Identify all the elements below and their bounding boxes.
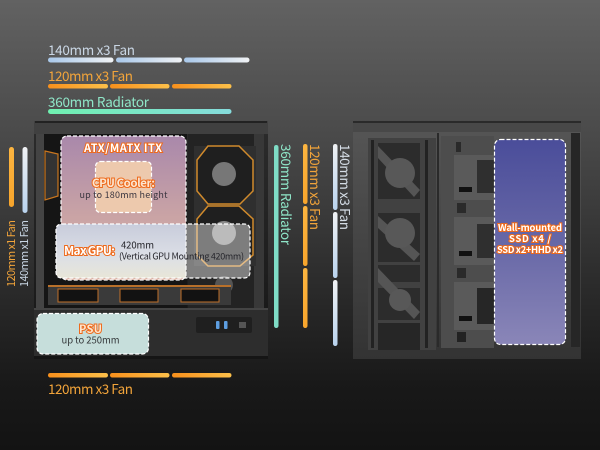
Max GPU zone: Max GPU: xyxy=(64,242,115,259)
right vertical: 140mm x3 fan: 140mm x3 Fan xyxy=(336,144,356,230)
radiator fan 1 xyxy=(194,146,256,206)
rear fan 1 xyxy=(378,143,420,199)
right vertical: 120mm x3 fan: 120mm x3 Fan xyxy=(306,144,326,230)
drive plate column xyxy=(441,136,494,348)
PSU zone xyxy=(37,314,148,354)
rear fan 2 xyxy=(378,213,420,262)
top bar group: 120mm x3 fan xyxy=(48,65,232,88)
PSU zone: up to 250mm xyxy=(62,332,120,346)
CPU cooler zone: up to 180mm height xyxy=(80,188,168,201)
left vertical: 120mm x1 fan: 120mm x1 Fan xyxy=(3,220,19,287)
CPU cooler zone: CPU Cooler: xyxy=(92,175,155,191)
left case: front view xyxy=(34,121,268,310)
top bar group: 140mm x3 fan: 140mm x3 Fan xyxy=(48,39,135,59)
Max GPU zone xyxy=(56,224,250,278)
bottom bar group: 120mm x3 fan: 120mm x3 Fan xyxy=(48,378,133,398)
right vertical: 120mm x3 fan xyxy=(303,144,326,328)
lower vent block xyxy=(378,323,420,350)
wall-mounted drive zone: SSD x4 / xyxy=(509,231,551,245)
right case: rear view xyxy=(353,121,581,359)
left vertical: 120mm x1 fan xyxy=(3,147,19,287)
top bar group: 360mm radiator xyxy=(48,91,232,114)
left vertical: 140mm x1 fan: 140mm x1 Fan xyxy=(16,220,32,287)
radiator fan 3 hub xyxy=(215,276,233,294)
ATX/MATX ITX zone xyxy=(61,136,186,280)
rear fan 3 xyxy=(378,265,420,320)
top bar group: 140mm x3 fan xyxy=(48,39,250,62)
bottom bar group: 120mm x3 fan xyxy=(48,373,232,398)
wall-mounted drive zone xyxy=(494,140,566,344)
bottom fans xyxy=(48,285,231,305)
right vertical: 360mm radiator xyxy=(274,144,297,328)
CPU cooler zone xyxy=(80,162,168,212)
left side fan orange frame xyxy=(45,151,58,200)
wall-mounted drive zone: SSD x2+HHD x2 xyxy=(497,242,563,256)
radiator fan 2 xyxy=(194,206,256,266)
right vertical: 140mm x3 fan xyxy=(333,144,356,346)
PSU zone: PSU xyxy=(79,321,102,337)
top bar group: 120mm x3 fan: 120mm x3 Fan xyxy=(48,65,133,85)
fan bracket column xyxy=(368,138,436,350)
right vertical: 360mm radiator: 360mm Radiator xyxy=(277,144,297,246)
top bar group: 360mm radiator: 360mm Radiator xyxy=(48,91,150,111)
left vertical: 140mm x1 fan xyxy=(16,147,32,287)
Max GPU zone: 420mm xyxy=(121,238,154,252)
PSU shroud with front IO xyxy=(34,308,268,359)
ATX/MATX ITX zone: ATX/MATX ITX xyxy=(83,140,162,156)
wall-mounted drive zone: Wall-mounted xyxy=(498,220,562,234)
Max GPU zone: (Vertical GPU Mounting 420mm) xyxy=(119,250,244,262)
